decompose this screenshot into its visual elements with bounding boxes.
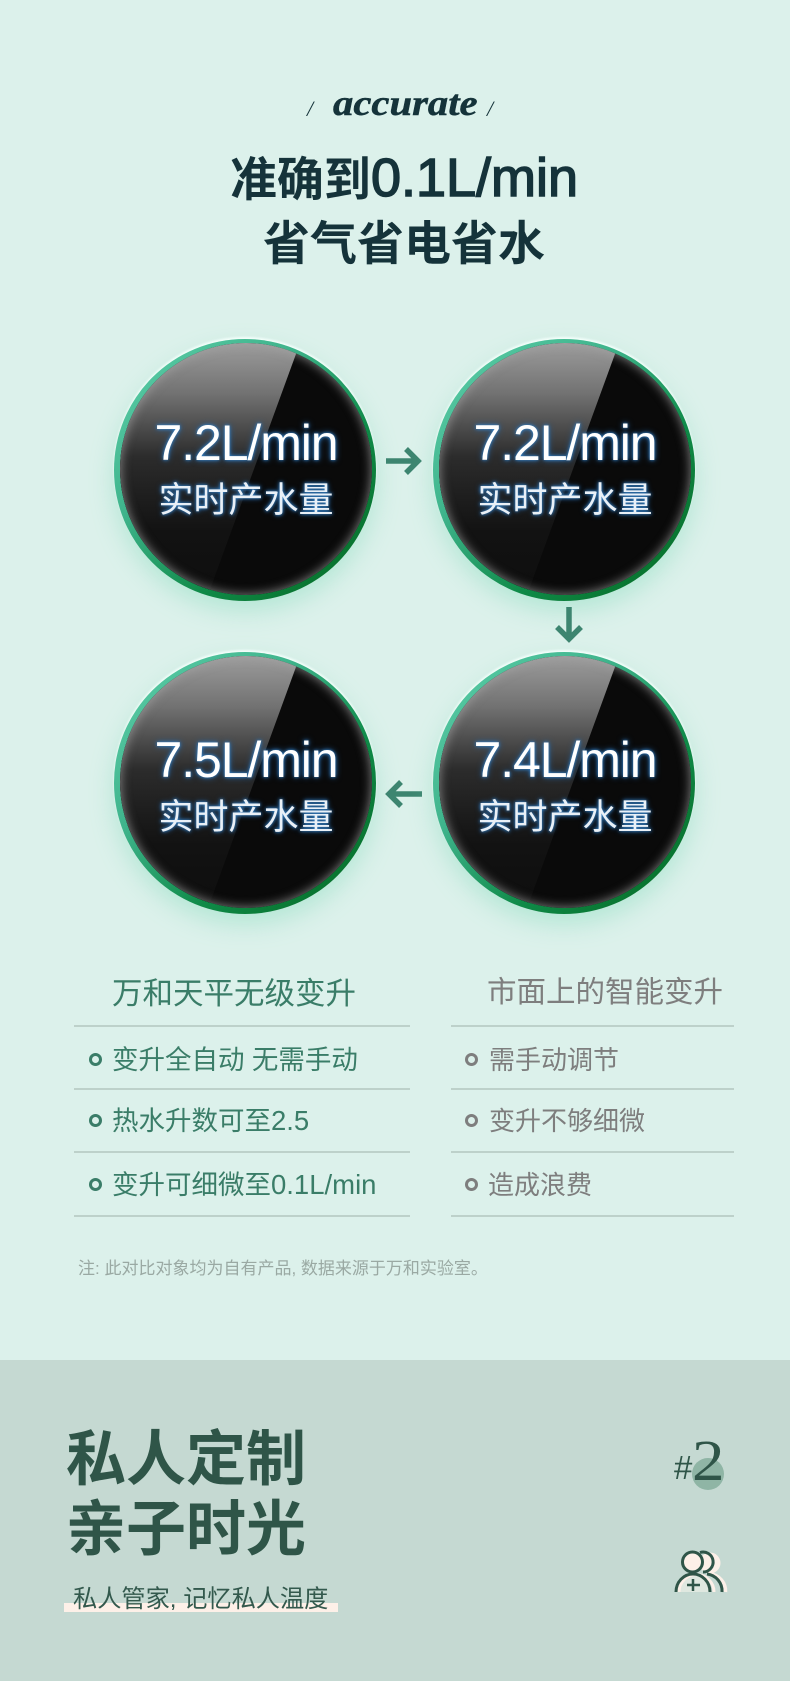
band title line 1: 私人定制: [66, 1426, 306, 1493]
column heading: market: 市面上的智能变升: [487, 976, 723, 1009]
gauge: 7.2L/min top right: 实时产水量: [477, 481, 652, 520]
band subtitle: 私人管家, 记忆私人温度: [73, 1586, 328, 1613]
highlight bar: [64, 1603, 338, 1612]
gauge: 7.5L/min bottom left: [104, 650, 386, 934]
gauge: 7.5L/min bottom left: 实时产水量: [158, 798, 334, 837]
title line 1: 准确到0.1L/min: [230, 148, 578, 208]
gauge: 7.5L/min bottom left: 7.5L/min: [154, 732, 337, 788]
arrow: right: [386, 447, 422, 475]
title line 2: 省气省电省水: [263, 217, 545, 270]
gauge: 7.2L/min top left: 实时产水量: [158, 481, 334, 520]
item 1: 变升全自动 无需手动: [112, 1045, 358, 1075]
item 3: 造成浪费: [488, 1170, 592, 1200]
item 2: 热水升数可至2.5: [112, 1105, 309, 1136]
gauge: 7.4L/min bottom right: 实时产水量: [477, 798, 652, 837]
column heading: wanhe: 万和天平无级变升: [112, 977, 356, 1011]
arrow: down: [555, 607, 583, 643]
section number: #: [674, 1449, 692, 1486]
gauge: 7.2L/min top left: 7.2L/min: [154, 415, 337, 471]
panel: bottom band: [0, 1360, 790, 1681]
subtitle: accurate: /: [487, 96, 493, 121]
icon: family: [674, 1550, 728, 1592]
band title line 2: 亲子时光: [66, 1496, 306, 1563]
item 1: 需手动调节: [489, 1045, 619, 1075]
footnote: 注: 此对比对象均为自有产品, 数据来源于万和实验室。: [78, 1259, 488, 1278]
subtitle: accurate: /: [307, 96, 313, 121]
panel: market comparison column: [451, 976, 734, 1217]
section number: [674, 1428, 724, 1493]
gauge: 7.2L/min top right: 7.2L/min: [474, 415, 656, 471]
arrow: left: [385, 780, 422, 808]
section number: 2: [692, 1428, 724, 1493]
gauge: 7.4L/min bottom right: 7.4L/min: [474, 732, 656, 788]
subtitle: accurate: accurate: [333, 83, 478, 123]
panel: wanhe comparison column: [74, 977, 410, 1217]
item 3: 变升可细微至0.1L/min: [112, 1169, 376, 1200]
gauge: 7.2L/min top right: [424, 337, 704, 620]
item 2: 变升不够细微: [489, 1106, 645, 1136]
gauge: 7.4L/min bottom right: [424, 650, 704, 934]
gauge: 7.2L/min top left: [104, 337, 386, 620]
